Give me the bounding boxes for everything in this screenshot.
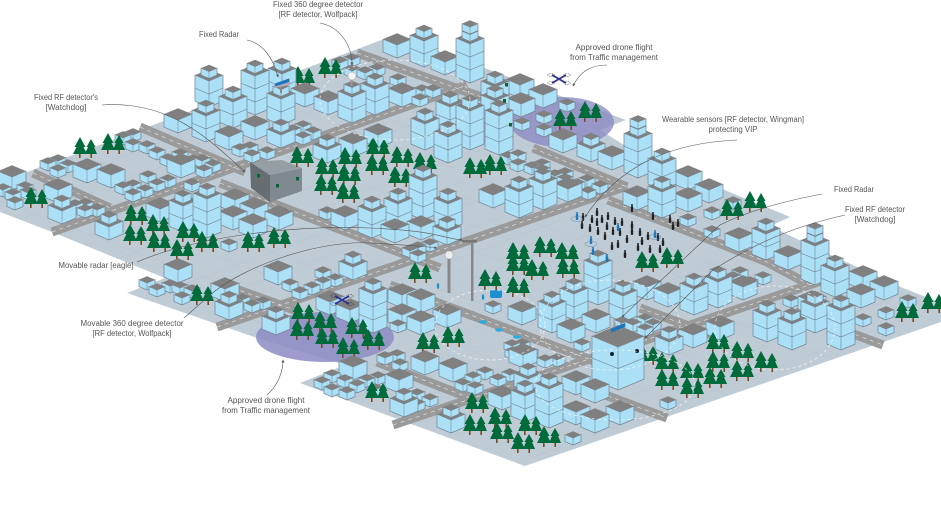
road network bbox=[33, 53, 883, 425]
label: approved drone flight lower: Approved drone flight bbox=[228, 395, 305, 405]
label: movable 360 degree detector: [RF detector, Wolfpack] bbox=[92, 328, 172, 338]
city band 2 bbox=[164, 60, 602, 133]
label: fixed radar right: Fixed Radar bbox=[834, 184, 874, 194]
city band 1 bbox=[268, 20, 534, 100]
label: fixed 360 degree detector bbox=[273, 0, 363, 19]
fixed radar on roof bbox=[274, 78, 290, 93]
approved flight zone lower bbox=[256, 312, 394, 362]
city band 10 bbox=[262, 278, 894, 352]
fixed 360 degree detector dome bbox=[348, 72, 356, 86]
label: movable 360 degree detector bbox=[80, 318, 184, 338]
label: wearable sensors: protecting VIP bbox=[708, 124, 758, 134]
label: approved drone flight upper bbox=[570, 42, 659, 62]
label: fixed radar left: Fixed Radar bbox=[199, 29, 239, 39]
blue van and moving dots bbox=[437, 283, 521, 339]
label: approved drone flight lower: from Traffic management bbox=[222, 405, 311, 415]
detector sensors on tower bbox=[503, 83, 512, 126]
label: approved drone flight upper: from Traffic management bbox=[570, 52, 659, 62]
approved flight zone upper bbox=[510, 97, 614, 147]
drone upper bbox=[548, 74, 570, 84]
label: movable 360 degree detector: Movable 360 degree detector bbox=[80, 318, 184, 328]
city band 8 bbox=[139, 222, 898, 300]
city band 6 bbox=[7, 165, 767, 235]
city band 3 bbox=[73, 95, 577, 160]
crowd of people bbox=[581, 204, 679, 258]
movable radar masts bbox=[445, 240, 477, 301]
label: wearable sensors: Wearable sensors [RF detector, Wingman] bbox=[662, 114, 804, 124]
city band 12 bbox=[314, 363, 704, 453]
label: approved drone flight lower bbox=[222, 395, 311, 415]
gray fixed RF detector building bbox=[250, 160, 302, 202]
label: fixed RF detector right: Fixed RF detector bbox=[845, 204, 905, 214]
label: wearable sensors bbox=[662, 114, 804, 134]
label: fixed RF detector right bbox=[845, 204, 905, 224]
drone lower bbox=[330, 295, 354, 305]
label: fixed 360 degree detector: [RF detector, Wolfpack] bbox=[278, 9, 358, 19]
label: fixed RF detector right: [Watchdog] bbox=[854, 214, 896, 224]
city band 4 bbox=[40, 115, 652, 178]
label: approved drone flight upper: Approved drone flight bbox=[576, 42, 653, 52]
detection range rings bbox=[320, 60, 835, 420]
label: movable radar: Movable radar [eagle] bbox=[58, 260, 134, 270]
city band 11 bbox=[324, 326, 778, 388]
label: fixed RF detectors bbox=[34, 92, 98, 112]
city band 9 bbox=[174, 250, 941, 323]
leader lines bbox=[102, 23, 845, 395]
label: fixed RF detectors: [Watchdog] bbox=[46, 102, 86, 112]
label: fixed RF detectors: Fixed RF detector's bbox=[34, 92, 98, 102]
city band 5 bbox=[0, 148, 723, 203]
wearable sensor carriers bbox=[571, 212, 661, 262]
city band 7 bbox=[95, 183, 802, 270]
tall building with fixed radar and RF detector bbox=[592, 322, 644, 390]
